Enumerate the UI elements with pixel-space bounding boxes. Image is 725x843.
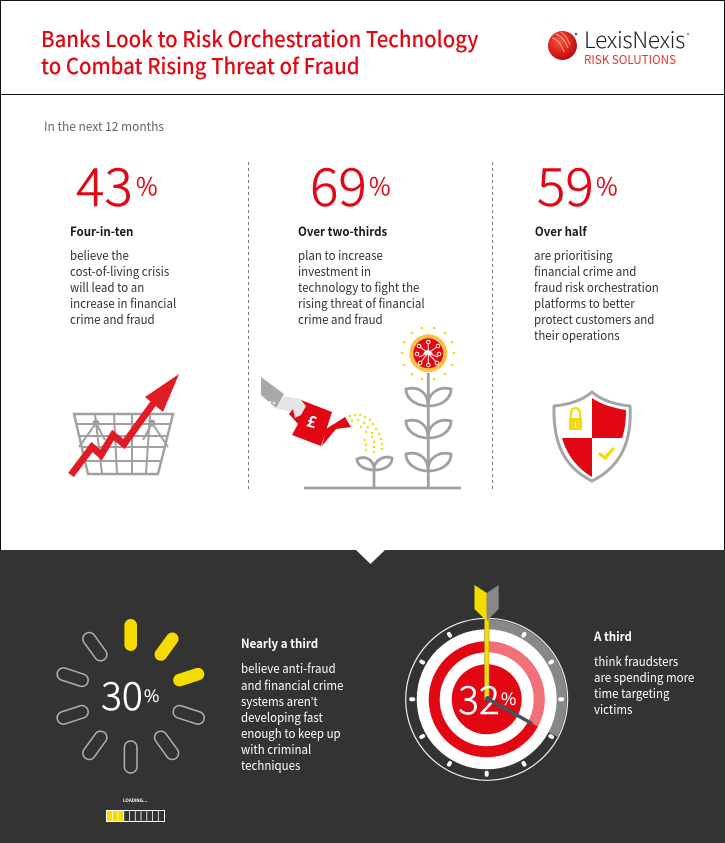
stat: 43%: cost-of-living crisis: [70, 262, 170, 280]
stat: 69%: crime and fraud: [298, 310, 383, 328]
text: nearly a third: believe anti-fraud: [241, 659, 336, 677]
stat: 59%: fraud risk orchestration: [534, 278, 659, 296]
logo: LexisNexis Risk Solutions: RISK SOLUTIONS: [584, 51, 676, 68]
text: nearly a third: systems aren’t: [241, 692, 318, 710]
text: a third: victims: [594, 700, 633, 718]
stat: 59%: are prioritising: [534, 246, 613, 264]
stat: 59%: Over half: [535, 222, 587, 240]
stat: 69%: [298, 146, 425, 328]
stat: 69%: investment in: [298, 262, 371, 280]
loading bar: [106, 798, 164, 822]
dark panel: [0, 550, 725, 843]
stat: 69%: 69: [310, 146, 367, 222]
title: to Combat Rising Threat of Fraud: [41, 49, 360, 81]
text: a third: A third: [593, 627, 632, 645]
text: nearly a third: techniques: [241, 756, 301, 774]
stat: 43%: [70, 146, 176, 328]
text: nearly a third: with criminal: [241, 740, 311, 758]
stat: 43%: %: [136, 167, 158, 202]
text: a third: [593, 627, 695, 718]
text: nearly a third: [241, 634, 344, 774]
chart: dartboard gauge 32%: 32: [458, 670, 500, 726]
loading bar: LOADING...: [123, 798, 148, 804]
stat: 69%: Over two-thirds: [298, 222, 387, 240]
chart: dartboard gauge 32%: [406, 585, 568, 780]
stat: 59%: platforms to better: [534, 294, 635, 312]
stat: 43%: increase in financial: [70, 294, 176, 312]
icon: watering can and plants: [261, 327, 461, 488]
chart: loading spinner 30%: %: [144, 682, 159, 707]
stat: 59%: their operations: [534, 326, 620, 344]
title: [41, 22, 479, 81]
stat: 43%: Four-in-ten: [70, 222, 133, 240]
icon: watering can and plants: £: [304, 408, 320, 433]
logo: LexisNexis Risk Solutions: ®: [687, 32, 690, 39]
chart: dartboard gauge 32%: %: [501, 685, 516, 710]
chart: loading spinner 30%: [56, 619, 206, 773]
stat: 59%: financial crime and: [534, 262, 636, 280]
logo: LexisNexis Risk Solutions: LexisNexis: [584, 23, 685, 55]
icon: shield: [554, 392, 630, 481]
icon: basket with rising arrow: [71, 374, 179, 475]
stat: 59%: %: [596, 167, 618, 202]
stat: 69%: technology to fight the: [298, 278, 420, 296]
text: a third: time targeting: [594, 684, 670, 702]
stat: 43%: believe the: [70, 246, 129, 264]
text: nearly a third: developing fast: [241, 708, 323, 726]
stat: 59%: 59: [537, 146, 594, 222]
text: nearly a third: Nearly a third: [241, 634, 318, 652]
stat: 59%: protect customers and: [534, 310, 654, 328]
stat: 59%: [534, 146, 659, 344]
text: nearly a third: and financial crime: [241, 676, 344, 694]
stat: 69%: plan to increase: [298, 246, 383, 264]
subheading: In the next 12 months: [44, 116, 164, 135]
logo: LexisNexis Risk Solutions: [548, 23, 690, 68]
text: nearly a third: enough to keep up: [241, 724, 341, 742]
stat: 43%: 43: [76, 146, 133, 222]
stat: 69%: %: [369, 167, 391, 202]
text: a third: think fraudsters: [594, 652, 679, 670]
stat: 69%: rising threat of financial: [298, 294, 425, 312]
stat: 43%: crime and fraud: [70, 310, 155, 328]
text: a third: are spending more: [594, 668, 695, 686]
title: Banks Look to Risk Orchestration Technology: [41, 22, 479, 54]
chart: loading spinner 30%: 30: [101, 666, 143, 722]
stat: 43%: will lead to an: [70, 278, 144, 296]
